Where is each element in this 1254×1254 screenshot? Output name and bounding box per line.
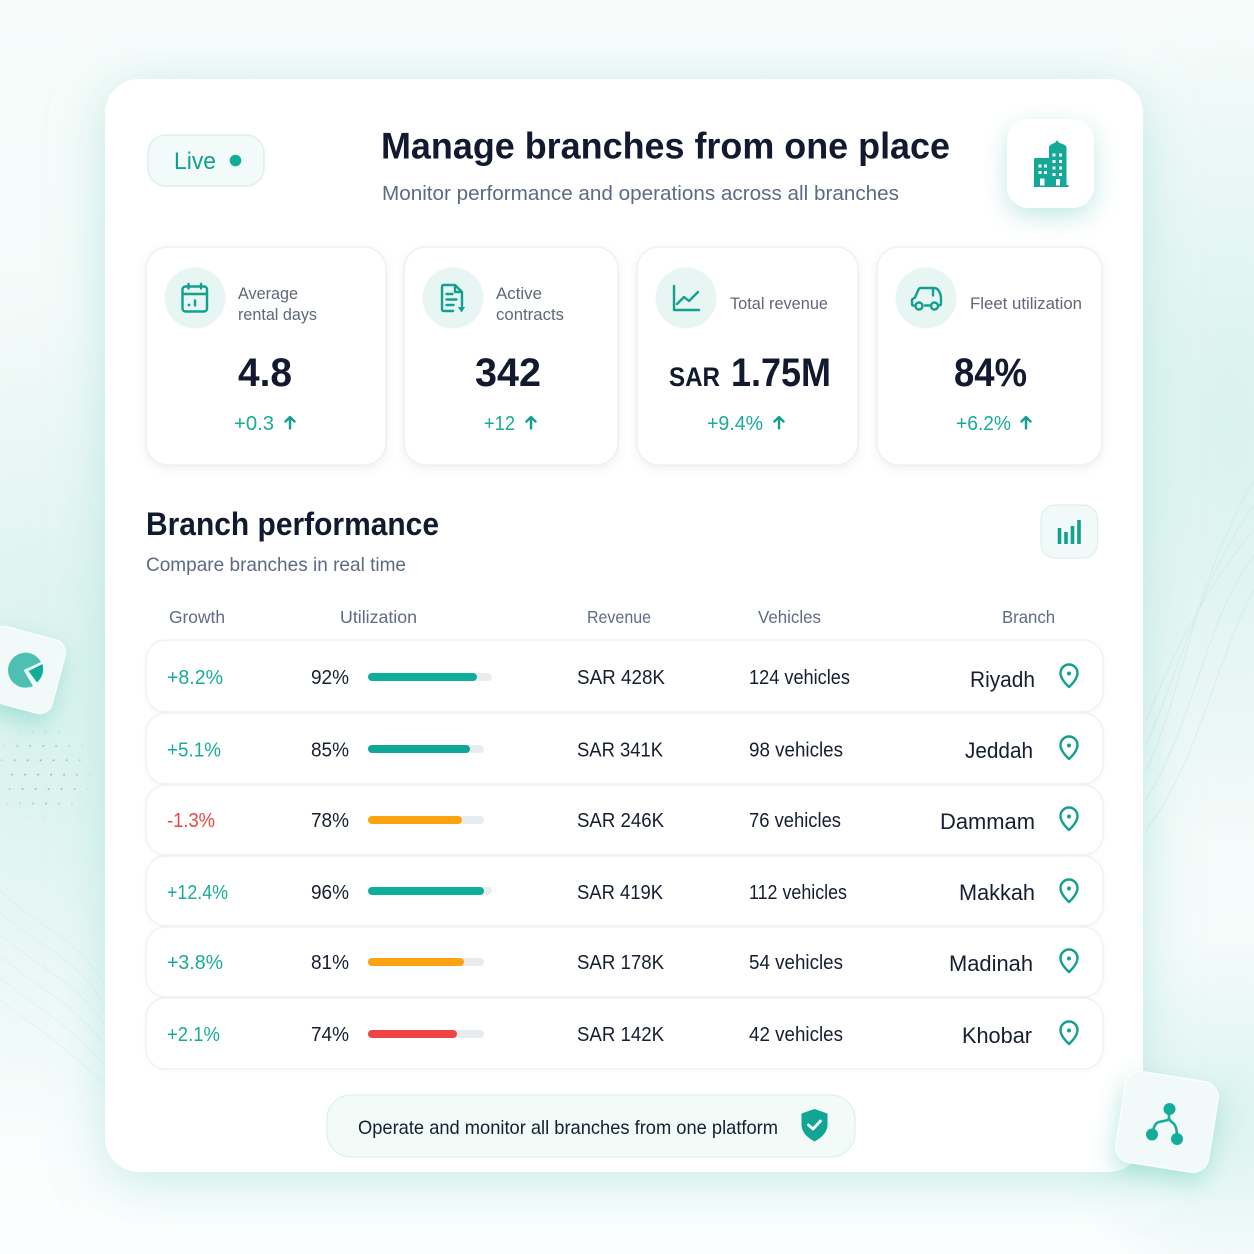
row: Jeddah: Jeddah <box>965 738 1033 763</box>
stat card: total revenue: SAR <box>669 362 720 392</box>
table headers: Branch <box>1002 607 1055 627</box>
row: Riyadh: SAR 428K <box>577 667 666 689</box>
row: Khobar: 42 vehicles <box>749 1024 843 1046</box>
stat card: total revenue: +9.4% <box>707 413 763 435</box>
row: Riyadh: 92% <box>311 667 349 689</box>
icon: contract document <box>422 268 484 328</box>
stat card: active contracts: Active <box>496 285 542 303</box>
stat card: fleet utilization: Fleet utilization <box>970 295 1082 313</box>
row: Riyadh: Riyadh <box>970 667 1035 692</box>
row: Dammam: Dammam <box>940 809 1035 834</box>
stat card: average rental days: 4.8 <box>238 351 292 395</box>
row: Madinah: 54 vehicles <box>749 952 843 974</box>
row: Dammam: SAR 246K <box>577 810 665 832</box>
stat card: average rental days: +0.3 <box>234 413 274 435</box>
stat card: total revenue <box>637 247 858 465</box>
row: Jeddah: 98 vehicles <box>749 740 843 762</box>
icon: pin <box>1060 880 1078 902</box>
stat card: total revenue: 1.75M <box>731 351 831 395</box>
icon: calendar <box>164 268 226 328</box>
icon: vehicle <box>896 268 956 328</box>
footer callout <box>327 1095 855 1157</box>
row: Makkah: 112 vehicles <box>749 882 847 904</box>
row: Jeddah: +5.1% <box>167 740 221 762</box>
row: Madinah: SAR 178K <box>577 952 665 974</box>
row: Madinah: Madinah <box>949 951 1033 976</box>
icon: pin <box>1060 664 1078 687</box>
row: Jeddah: 85% <box>311 740 349 762</box>
stat card: fleet utilization: 84% <box>954 351 1027 395</box>
row: Dammam <box>146 785 1103 855</box>
main card <box>105 79 1143 1172</box>
icon: buildings <box>1007 119 1094 208</box>
table headers <box>169 607 1055 627</box>
icon: line chart <box>656 268 716 328</box>
stat card: fleet utilization: +6.2% <box>956 413 1011 435</box>
row: Makkah <box>146 856 1103 926</box>
stat card: active contracts: contracts <box>496 306 564 324</box>
section subtitle: Compare branches in real time <box>146 554 406 576</box>
floating icon: network nodes <box>1113 1069 1221 1175</box>
row: Madinah: 81% <box>311 952 349 974</box>
table headers: Revenue <box>587 607 651 627</box>
floating icon: pie chart <box>0 623 69 717</box>
row: Khobar: 74% <box>311 1024 349 1046</box>
row: Madinah <box>146 927 1103 997</box>
row: Jeddah: SAR 341K <box>577 740 664 762</box>
footer callout: Operate and monitor all branches from one platform <box>358 1117 778 1139</box>
icon: shield <box>802 1109 828 1142</box>
stat card: total revenue: Total revenue <box>730 295 828 313</box>
table headers: Utilization <box>340 607 417 627</box>
row: Jeddah <box>146 713 1103 784</box>
row: Dammam: 76 vehicles <box>749 810 841 832</box>
icon: pin <box>1060 1022 1078 1044</box>
title: Manage branches from one place <box>381 126 950 166</box>
row: Riyadh <box>146 640 1103 712</box>
section heading: Branch performance <box>146 506 439 542</box>
icon: pin <box>1060 950 1078 972</box>
row: Makkah: Makkah <box>959 880 1035 905</box>
row: Dammam: 78% <box>311 810 349 832</box>
live badge <box>148 135 264 186</box>
table headers: Vehicles <box>758 607 821 627</box>
row: Khobar <box>146 998 1103 1069</box>
table headers: Growth <box>169 607 225 627</box>
row: Khobar: SAR 142K <box>577 1024 665 1046</box>
subtitle: Monitor performance and operations across all branches <box>382 182 899 205</box>
icon: pin <box>1060 808 1078 830</box>
icon: bar chart <box>1041 505 1098 558</box>
row: Makkah: 96% <box>311 882 349 904</box>
row: Riyadh: 124 vehicles <box>749 667 850 689</box>
live badge: Live <box>174 148 216 175</box>
icon: pin <box>1060 736 1078 759</box>
stat card: average rental days: Average <box>238 285 298 303</box>
stat card: active contracts: +12 <box>484 413 515 435</box>
row: Dammam: -1.3% <box>167 810 215 832</box>
row: Madinah: +3.8% <box>167 952 223 974</box>
row: Khobar: Khobar <box>962 1023 1032 1048</box>
row: Khobar: +2.1% <box>167 1024 220 1046</box>
row: Makkah: SAR 419K <box>577 882 664 904</box>
stat card: average rental days: rental days <box>238 306 317 324</box>
row: Makkah: +12.4% <box>167 882 228 904</box>
row: Riyadh: +8.2% <box>167 667 223 689</box>
stat card: active contracts <box>404 247 618 465</box>
stat card: active contracts: 342 <box>475 351 541 395</box>
stat card: fleet utilization <box>877 247 1102 465</box>
stat card: average rental days <box>146 247 386 465</box>
